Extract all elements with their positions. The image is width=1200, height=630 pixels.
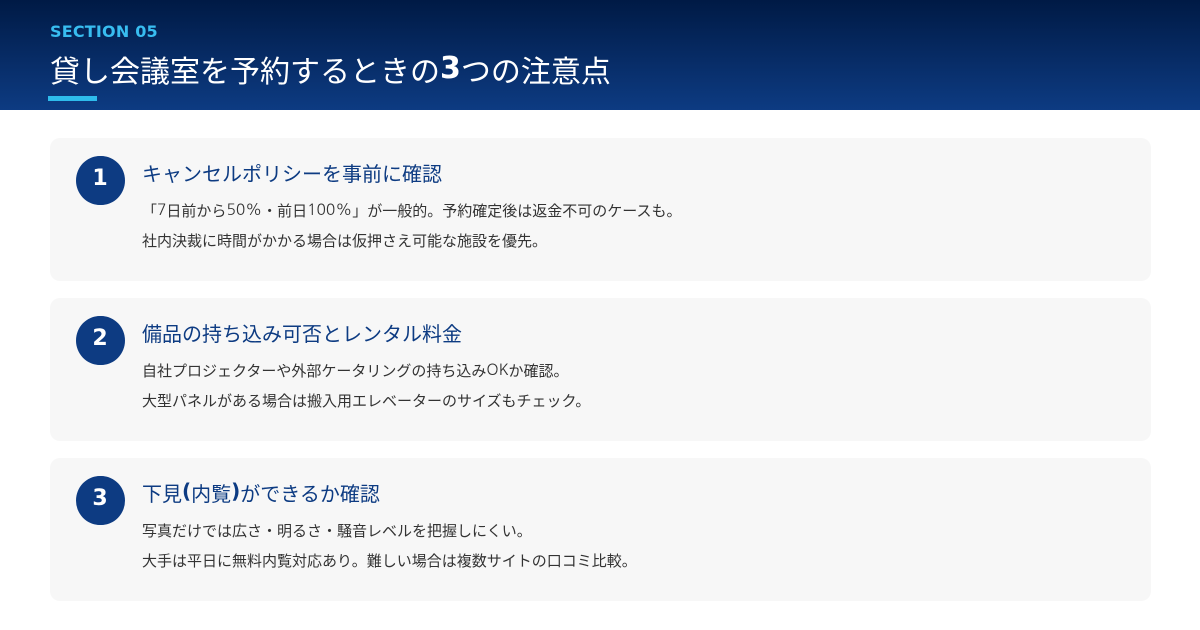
heading 1: キャンセルポリシーを事前に確認: [142, 162, 442, 186]
text line 1-1: 「7日前から50%・前日100%」が一般的。予約確定後は返金不可のケースも。: [142, 202, 681, 220]
number badge 3: [76, 476, 124, 525]
number badge 2: [76, 316, 124, 365]
title accent bar: [48, 96, 97, 101]
panel: card 2: [50, 298, 1151, 441]
heading 3: 下見(内覧)ができるか確認: [142, 479, 380, 506]
text line 1-2: 社内決裁に時間がかかる場合は仮押さえ可能な施設を優先。: [142, 232, 547, 250]
text line 2-2: 大型パネルがある場合は搬入用エレベーターのサイズもチェック。: [142, 392, 590, 410]
number badge 2: 2: [92, 326, 108, 351]
text line 3-2: 大手は平日に無料内覧対応あり。難しい場合は複数サイトの口コミ比較。: [142, 552, 637, 570]
number badge 3: 3: [92, 486, 108, 511]
title: 貸し会議室を予約するときの3つの注意点: [50, 51, 611, 90]
panel: card 3: [50, 458, 1151, 601]
text line 2-1: 自社プロジェクターや外部ケータリングの持ち込みOKか確認。: [142, 362, 569, 380]
section label: SECTION 05: [50, 22, 158, 41]
panel: card 1: [50, 138, 1151, 281]
number badge 1: 1: [92, 166, 108, 191]
header band: [0, 0, 1200, 110]
heading 2: 備品の持ち込み可否とレンタル料金: [142, 322, 462, 346]
number badge 1: [76, 156, 124, 205]
text line 3-1: 写真だけでは広さ・明るさ・騒音レベルを把握しにくい。: [142, 522, 532, 540]
